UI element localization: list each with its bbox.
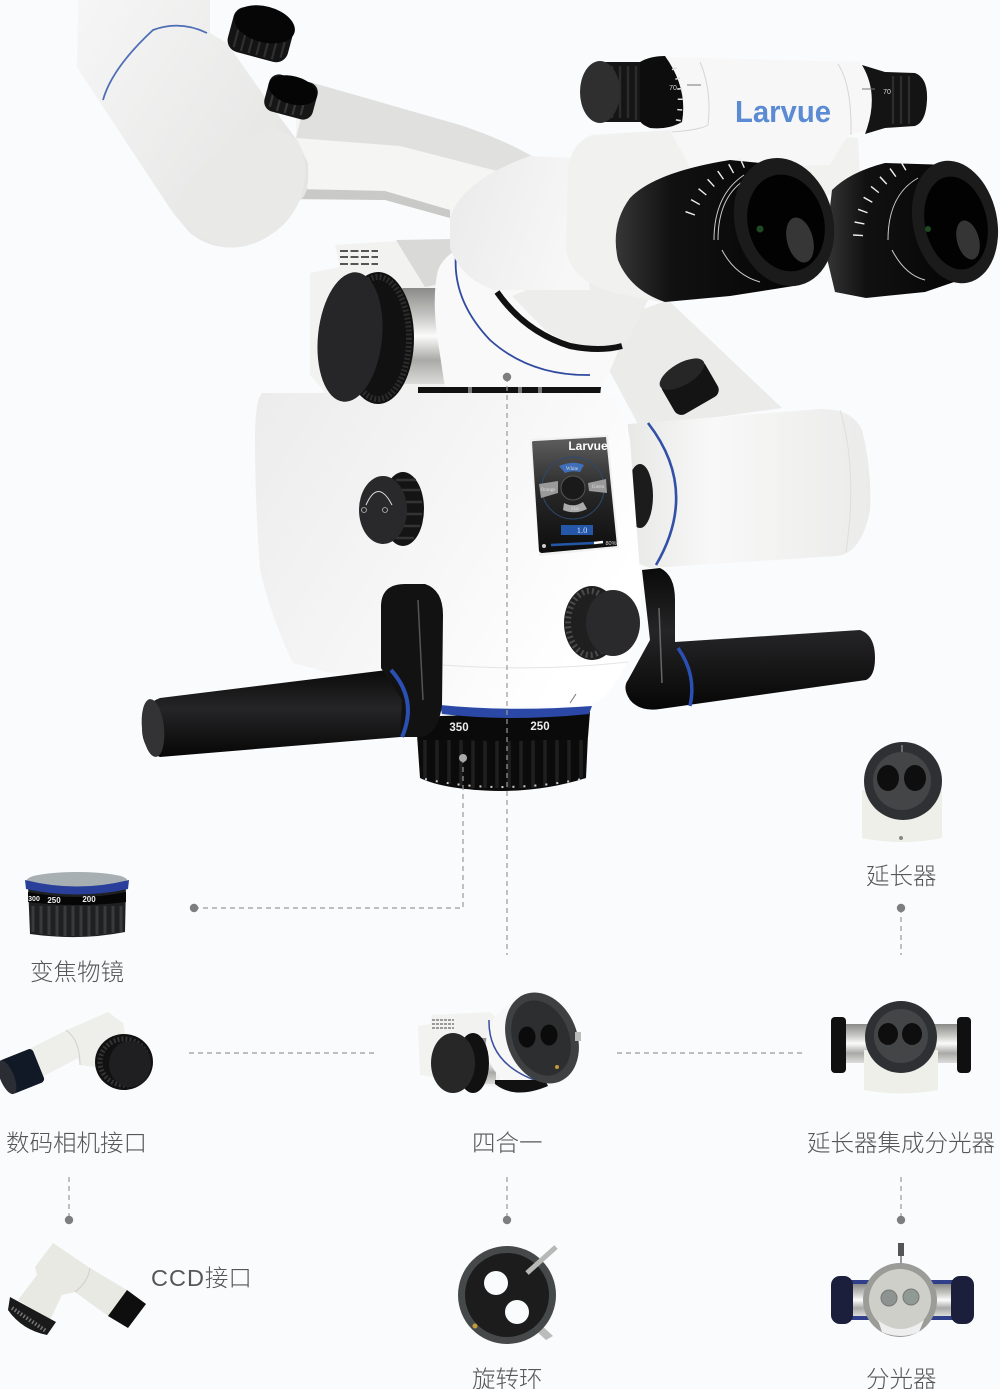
scale 350: 350 — [449, 722, 469, 734]
brand: Larvue — [735, 94, 831, 129]
module: zoom objective: 200 — [82, 895, 96, 904]
scale 250: 250 — [530, 721, 550, 733]
connector dots — [65, 373, 905, 1224]
rotating ring — [418, 387, 601, 396]
right dial: 70 — [883, 89, 891, 96]
right eyepiece — [825, 153, 1000, 298]
module: zoom objective: 300 — [28, 896, 40, 903]
magnification knob — [564, 586, 640, 660]
label: camera adapter: 数码相机接口 — [6, 1130, 147, 1156]
left eyepiece — [616, 147, 848, 302]
module: four-in-one — [418, 981, 592, 1095]
module: zoom objective — [25, 872, 129, 937]
front control knob — [359, 472, 424, 546]
rear plate — [560, 300, 782, 428]
module: camera adapter — [0, 1012, 153, 1097]
touch screen: White — [566, 467, 579, 472]
left dial — [580, 56, 701, 128]
microscope — [77, 0, 1000, 791]
label: integrated beam splitter: 延长器集成分光器 — [807, 1130, 995, 1156]
objective lens — [417, 705, 592, 791]
label: four-in-one: 四合一 — [472, 1130, 542, 1156]
module: CCD adapter — [8, 1243, 146, 1335]
touch screen: 1.0 — [577, 525, 587, 535]
side box — [310, 239, 453, 398]
ceiling arm — [296, 82, 570, 218]
label: zoom objective: 变焦物镜 — [30, 959, 124, 985]
connector lines — [69, 377, 901, 1220]
vents — [340, 251, 378, 264]
left dial: 70 — [669, 85, 677, 92]
touch screen: Flat — [571, 507, 579, 512]
module: zoom objective: 250 — [47, 896, 61, 905]
light tube — [627, 409, 870, 568]
neck ball — [450, 156, 590, 290]
touch screen: Green — [592, 485, 605, 490]
right dial — [862, 65, 927, 134]
rear small knob — [655, 352, 722, 418]
module: extender — [862, 742, 942, 842]
right handle — [625, 568, 875, 710]
rotating joint — [435, 240, 650, 388]
touch screen: Larvue — [568, 439, 608, 453]
silver cylinder — [398, 288, 450, 384]
binocular tube — [580, 56, 927, 168]
module: integrated beam splitter — [831, 1001, 971, 1094]
label: CCD adapter: CCD接口 — [151, 1265, 252, 1291]
upper tube — [77, 0, 308, 247]
tube knobs — [225, 0, 321, 122]
touch screen: 80% — [605, 541, 617, 547]
left handle — [139, 584, 443, 758]
label: extender: 延长器 — [866, 863, 936, 889]
touch screen — [530, 435, 619, 556]
module: beam splitter — [831, 1243, 974, 1337]
head body — [566, 125, 860, 302]
module: rotating ring — [458, 1246, 556, 1344]
side knob disc — [311, 269, 414, 405]
touch screen: Orange — [541, 488, 556, 493]
main body — [255, 393, 641, 706]
